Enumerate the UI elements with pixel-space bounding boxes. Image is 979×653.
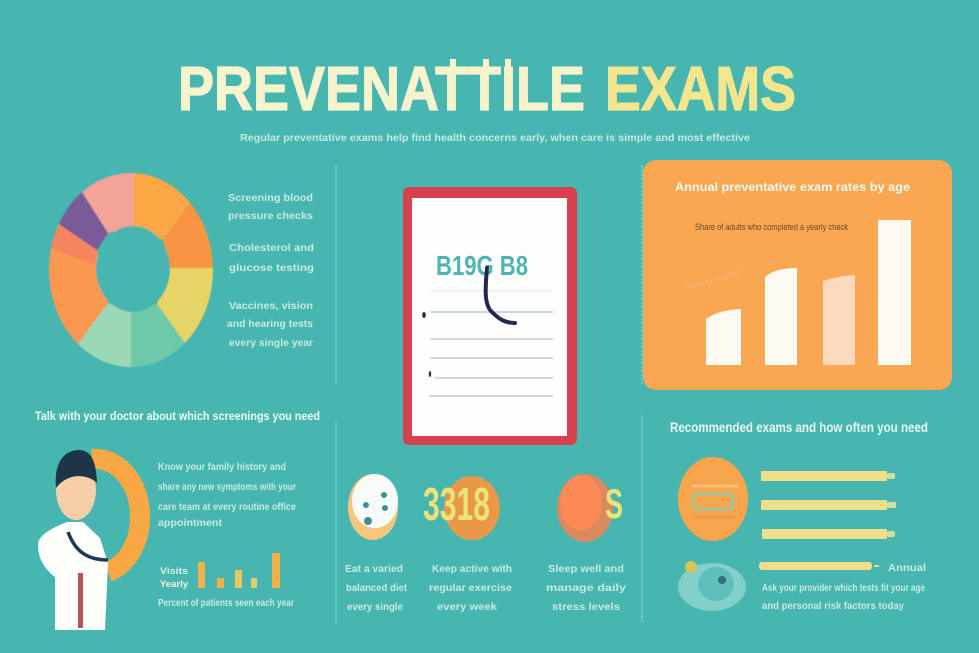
stethoscope (68, 532, 108, 560)
title: EXAMS (605, 55, 796, 124)
icon: white circle (348, 474, 398, 540)
panel: doctor illustration (38, 450, 140, 630)
circle captions: stress levels (552, 601, 620, 613)
donut legend text: Screening blood (228, 192, 313, 204)
donut segment: orange (162, 202, 214, 269)
card heading: B19G B8 (436, 250, 528, 281)
circle captions: Keep active with (432, 563, 512, 575)
icon: coral circle with number (557, 474, 623, 542)
left section heading: Talk with your doctor about which screenings you need (35, 409, 320, 423)
white coat (38, 522, 108, 630)
donut segment: teal green (130, 304, 185, 368)
icon: check mark stroke (486, 268, 515, 323)
icon: orange circle with number: 3318 (423, 478, 490, 530)
donut legend text: Vaccines, vision (229, 300, 313, 312)
donut segment: yellow (156, 267, 214, 344)
donut legend text (227, 192, 314, 349)
chart heading: Annual preventative exam rates by age (675, 180, 910, 194)
mini bar chart (158, 553, 294, 609)
doctor text block: Know your family history and (158, 461, 286, 473)
mini bar chart: Yearly (160, 579, 188, 589)
circle captions: every single (347, 601, 403, 613)
card lines (429, 291, 553, 396)
head (56, 460, 96, 520)
donut segment: pale green (78, 302, 132, 368)
chart note: Share of adults who completed a yearly check (695, 222, 848, 232)
chart faint label: Yearly trend (683, 268, 741, 293)
circle captions (345, 563, 626, 613)
mini chart caption: Percent of patients seen each year (158, 597, 294, 609)
orange ring (92, 459, 140, 572)
donut segment: large orange (48, 224, 109, 344)
panel: donut chart (48, 172, 214, 368)
subtitle: Regular preventative exams help find health concerns early, when care is simple and most effective (240, 132, 750, 144)
yellow progress bars (759, 471, 896, 570)
mini chart labels: Visits (160, 566, 188, 576)
donut legend text: and hearing tests (227, 318, 313, 330)
donut legend text: every single year (229, 337, 313, 349)
panel: document card (403, 187, 577, 445)
doctor text block: appointment (158, 517, 223, 529)
hair (56, 450, 97, 488)
panel: three circles (348, 474, 623, 542)
circle captions: manage daily (546, 582, 626, 594)
icon: orange circle with stacked lines (678, 457, 748, 541)
panel: orange bar chart (643, 160, 952, 390)
right section heading: Recommended exams and how often you need (670, 419, 928, 435)
card frame (403, 187, 577, 445)
right text block: Annual (888, 562, 926, 574)
doctor text block: care team at every routine office (158, 501, 296, 513)
right text block: Ask your provider which tests fit your age (762, 582, 925, 594)
donut segment: purple (58, 192, 108, 250)
donut hole (96, 226, 170, 312)
card sheet (412, 198, 567, 436)
circle captions: regular exercise (429, 582, 512, 594)
donut legend text: glucose testing (229, 262, 314, 274)
donut segment: light orange (133, 172, 190, 240)
doctor text block: share any new symptoms with your (158, 481, 296, 493)
donut legend text: pressure checks (228, 210, 313, 222)
donut legend text: Cholesterol and (229, 242, 314, 254)
icon: orange circle with number (423, 476, 500, 540)
donut segment: salmon sliver (51, 226, 97, 264)
icon: blob with yellow dot (678, 561, 746, 611)
circle captions: every week (437, 601, 497, 613)
right text block (762, 562, 926, 612)
icon: coral circle with number: S (605, 480, 623, 527)
circle captions: Sleep well and (548, 563, 624, 575)
circle captions: Eat a varied (345, 563, 403, 575)
chart bars (706, 220, 911, 365)
donut segment: pink (82, 172, 135, 234)
bullet marks (422, 312, 431, 377)
tie (78, 573, 83, 628)
right text block: and personal risk factors today (762, 600, 904, 612)
title: PREVENATTILE (178, 55, 585, 124)
circle captions: balanced diet (346, 582, 407, 594)
mini bars (198, 553, 280, 588)
chart background (643, 160, 952, 390)
doctor text block (158, 461, 296, 529)
